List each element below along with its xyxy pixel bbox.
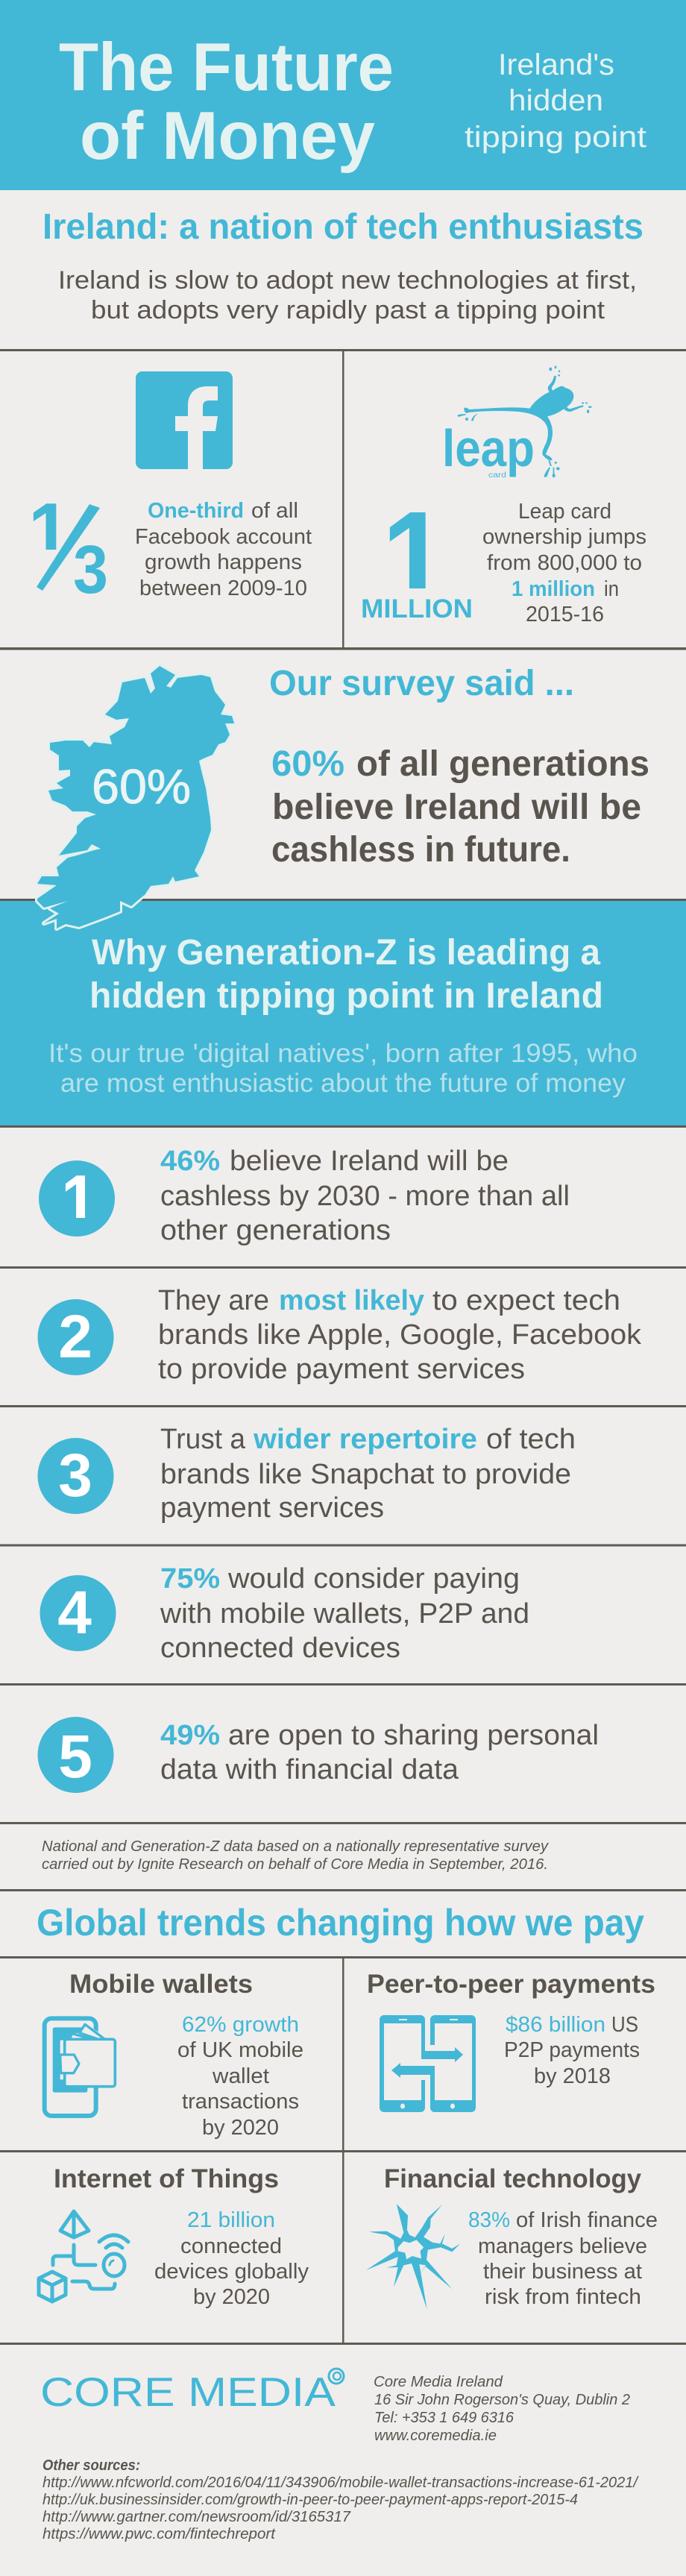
panel: generation-z banner — [0, 899, 686, 1125]
icon: facebook — [136, 371, 233, 469]
panel: leap card — [361, 365, 646, 632]
heading: why generation-z — [89, 933, 603, 1016]
one-third figure — [33, 503, 106, 594]
item 5 text: data with financial data — [160, 1754, 459, 1785]
header banner — [0, 0, 686, 190]
facebook text: growth happens — [145, 550, 302, 574]
subtitle: hidden — [509, 84, 603, 117]
number badge 4 — [40, 1575, 116, 1651]
item 1 text: cashless by 2030 - more than all — [160, 1181, 570, 1212]
item 3 text: of tech — [486, 1424, 576, 1455]
wallet text: wallet — [212, 2064, 269, 2088]
survey finding: 60% — [271, 744, 344, 784]
intro text — [58, 266, 637, 324]
contact details — [374, 2374, 630, 2444]
one million figure — [362, 512, 471, 618]
item 1 text: 46% — [160, 1146, 220, 1177]
iot text: 21 billion — [187, 2208, 275, 2232]
fintech text: 83% — [468, 2208, 510, 2232]
heading: global trends: Global trends changing how we pay — [37, 1902, 644, 1944]
wallet text: transactions — [182, 2090, 299, 2114]
p2p text: $86 billion — [506, 2013, 605, 2037]
panel: peer-to-peer payments — [367, 1970, 655, 2112]
map of ireland with 60% — [37, 666, 234, 929]
other sources: Other sources: — [43, 2457, 140, 2474]
list item 1 — [39, 1146, 570, 1246]
title: The Future — [59, 30, 394, 105]
icon: leap card frog logo: card — [488, 471, 506, 480]
title: of Money — [80, 98, 375, 174]
heading: financial technology: Financial technology — [384, 2164, 642, 2193]
p2p text: P2P payments — [504, 2038, 640, 2062]
item 5 text: 49% — [160, 1720, 220, 1751]
one million figure: MILLION — [361, 594, 473, 623]
fintech text: their business at — [483, 2260, 642, 2284]
contact details: Core Media Ireland — [374, 2374, 503, 2390]
subtitle: Ireland's — [498, 48, 614, 81]
heading: why generation-z: Why Generation-Z is leading a — [92, 933, 600, 973]
number badge 2: 2 — [58, 1303, 92, 1371]
panel: internet of things — [39, 2164, 309, 2309]
number badge 5 — [37, 1717, 113, 1793]
icon: cracked glass — [366, 2204, 460, 2310]
contact details: Tel: +353 1 649 6316 — [374, 2410, 514, 2426]
other sources — [43, 2457, 639, 2542]
other sources: http://uk.businessinsider.com/growth-in-peer-to-peer-payment-apps-report-2015-4 — [43, 2492, 578, 2508]
subtitle — [465, 48, 646, 154]
item 4 text — [160, 1563, 529, 1664]
icon: logo spiral — [329, 2369, 344, 2384]
icon: two phones with arrows — [380, 2015, 476, 2112]
generation-z intro: It's our true 'digital natives', born after 1995, who — [48, 1039, 638, 1068]
generation-z intro: are most enthusiastic about the future of money — [60, 1069, 626, 1098]
survey finding: of all generations — [356, 744, 649, 784]
survey footnote — [42, 1838, 549, 1873]
heading: why generation-z: hidden tipping point in Ireland — [89, 976, 603, 1016]
list item 3 — [37, 1424, 576, 1524]
one-third figure: 1 — [28, 486, 70, 576]
item 4 text: connected devices — [160, 1633, 400, 1664]
facebook text — [135, 499, 312, 600]
heading: peer-to-peer: Peer-to-peer payments — [367, 1970, 655, 1999]
survey finding: believe Ireland will be — [272, 788, 641, 827]
p2p text: US — [611, 2013, 638, 2037]
item 4 text: 75% — [160, 1563, 220, 1595]
facebook text: between 2009-10 — [139, 577, 307, 600]
other sources: https://www.pwc.com/fintechreport — [43, 2526, 276, 2542]
other sources: http://www.gartner.com/newsroom/id/3165317 — [43, 2509, 351, 2525]
icon: connected devices — [39, 2211, 128, 2302]
number badge 3 — [37, 1438, 113, 1514]
number badge 1: 1 — [61, 1160, 97, 1242]
list item 5 — [37, 1717, 599, 1793]
item 2 text: to provide payment services — [158, 1354, 525, 1385]
list item 4 — [40, 1563, 529, 1664]
iot text: connected — [180, 2234, 282, 2258]
heading: nation of tech enthusiasts: Ireland: a nation of tech enthusiasts — [43, 207, 643, 247]
wallet text: of UK mobile — [177, 2038, 303, 2062]
facebook text: of all — [251, 499, 298, 523]
number badge 4: 4 — [57, 1579, 92, 1647]
fintech text: risk from fintech — [485, 2285, 641, 2309]
p2p text — [504, 2013, 640, 2088]
item 3 text: brands like Snapchat to provide — [160, 1459, 571, 1490]
title — [59, 30, 394, 174]
heading: our survey said: Our survey said ... — [269, 664, 574, 703]
item 2 text — [158, 1285, 642, 1385]
one-third figure: 3 — [73, 532, 108, 608]
number badge 3: 3 — [58, 1442, 92, 1510]
item 1 text: believe Ireland will be — [230, 1146, 509, 1177]
survey finding: cashless in future. — [271, 830, 570, 870]
panel: survey — [37, 664, 649, 929]
leap text — [482, 500, 646, 626]
icon: leap card frog logo: leap — [442, 419, 535, 477]
panel: mobile wallets — [45, 1970, 303, 2140]
fintech text — [468, 2208, 658, 2309]
heading: mobile wallets: Mobile wallets — [69, 1970, 253, 1999]
item 1 text: other generations — [160, 1215, 391, 1246]
survey finding — [271, 744, 649, 870]
contact details: 16 Sir John Rogerson's Quay, Dublin 2 — [374, 2392, 630, 2408]
iot text: by 2020 — [193, 2285, 270, 2309]
map of ireland with 60%: 60% — [92, 759, 191, 814]
p2p text: by 2018 — [534, 2064, 611, 2088]
one million figure: 1 — [382, 483, 447, 632]
iot text: devices globally — [154, 2260, 309, 2284]
icon: mobile wallet — [45, 2018, 115, 2116]
item 2 text: most likely — [279, 1285, 424, 1316]
list item 2 — [37, 1285, 642, 1385]
number badge 1 — [39, 1160, 115, 1242]
icon: leap card frog logo — [442, 365, 592, 480]
facebook text: Facebook account — [135, 525, 312, 549]
number badge 2 — [37, 1299, 113, 1375]
facebook text: One-third — [148, 499, 244, 523]
item 2 text: to expect tech — [432, 1285, 620, 1316]
generation-z intro — [48, 1039, 638, 1098]
survey footnote: National and Generation-Z data based on a nationally representative survey — [42, 1838, 549, 1855]
intro text: but adopts very rapidly past a tipping point — [91, 296, 605, 324]
leap text: 1 million — [512, 577, 595, 601]
intro text: Ireland is slow to adopt new technologies at first, — [58, 266, 637, 295]
item 1 text — [160, 1146, 570, 1246]
item 3 text: payment services — [160, 1492, 384, 1524]
item 2 text: They are — [158, 1285, 269, 1316]
other sources: http://www.nfcworld.com/2016/04/11/343906/mobile-wallet-transactions-increase-61-2021/ — [43, 2475, 639, 2491]
contact details: www.coremedia.ie — [374, 2428, 497, 2444]
panel: financial technology — [366, 2164, 658, 2310]
iot text — [154, 2208, 309, 2309]
fintech text: of Irish finance — [516, 2208, 658, 2232]
wallet text: 62% growth — [182, 2013, 299, 2037]
item 5 text: are open to sharing personal — [228, 1720, 599, 1751]
leap text: ownership jumps — [482, 525, 646, 549]
panel: facebook — [28, 371, 312, 608]
number badge 5: 5 — [58, 1723, 92, 1791]
fintech text: managers believe — [478, 2234, 647, 2258]
item 3 text: Trust a — [160, 1424, 246, 1455]
wallet text: by 2020 — [202, 2116, 279, 2140]
item 3 text — [160, 1424, 576, 1524]
heading: internet of things: Internet of Things — [54, 2164, 279, 2193]
leap text: from 800,000 to — [487, 551, 642, 575]
leap text: in — [604, 577, 619, 601]
item 4 text: would consider paying — [227, 1563, 520, 1595]
leap text: 2015-16 — [526, 603, 604, 626]
item 3 text: wider repertoire — [253, 1424, 477, 1455]
item 2 text: brands like Apple, Google, Facebook — [158, 1319, 642, 1351]
wallet text — [177, 2013, 303, 2140]
logo: core media: CORE MEDIA — [40, 2369, 336, 2415]
leap text: Leap card — [518, 500, 611, 524]
survey footnote: carried out by Ignite Research on behalf of Core Media in September, 2016. — [42, 1856, 548, 1873]
item 5 text — [160, 1720, 599, 1785]
subtitle: tipping point — [465, 121, 646, 154]
item 4 text: with mobile wallets, P2P and — [160, 1598, 529, 1630]
